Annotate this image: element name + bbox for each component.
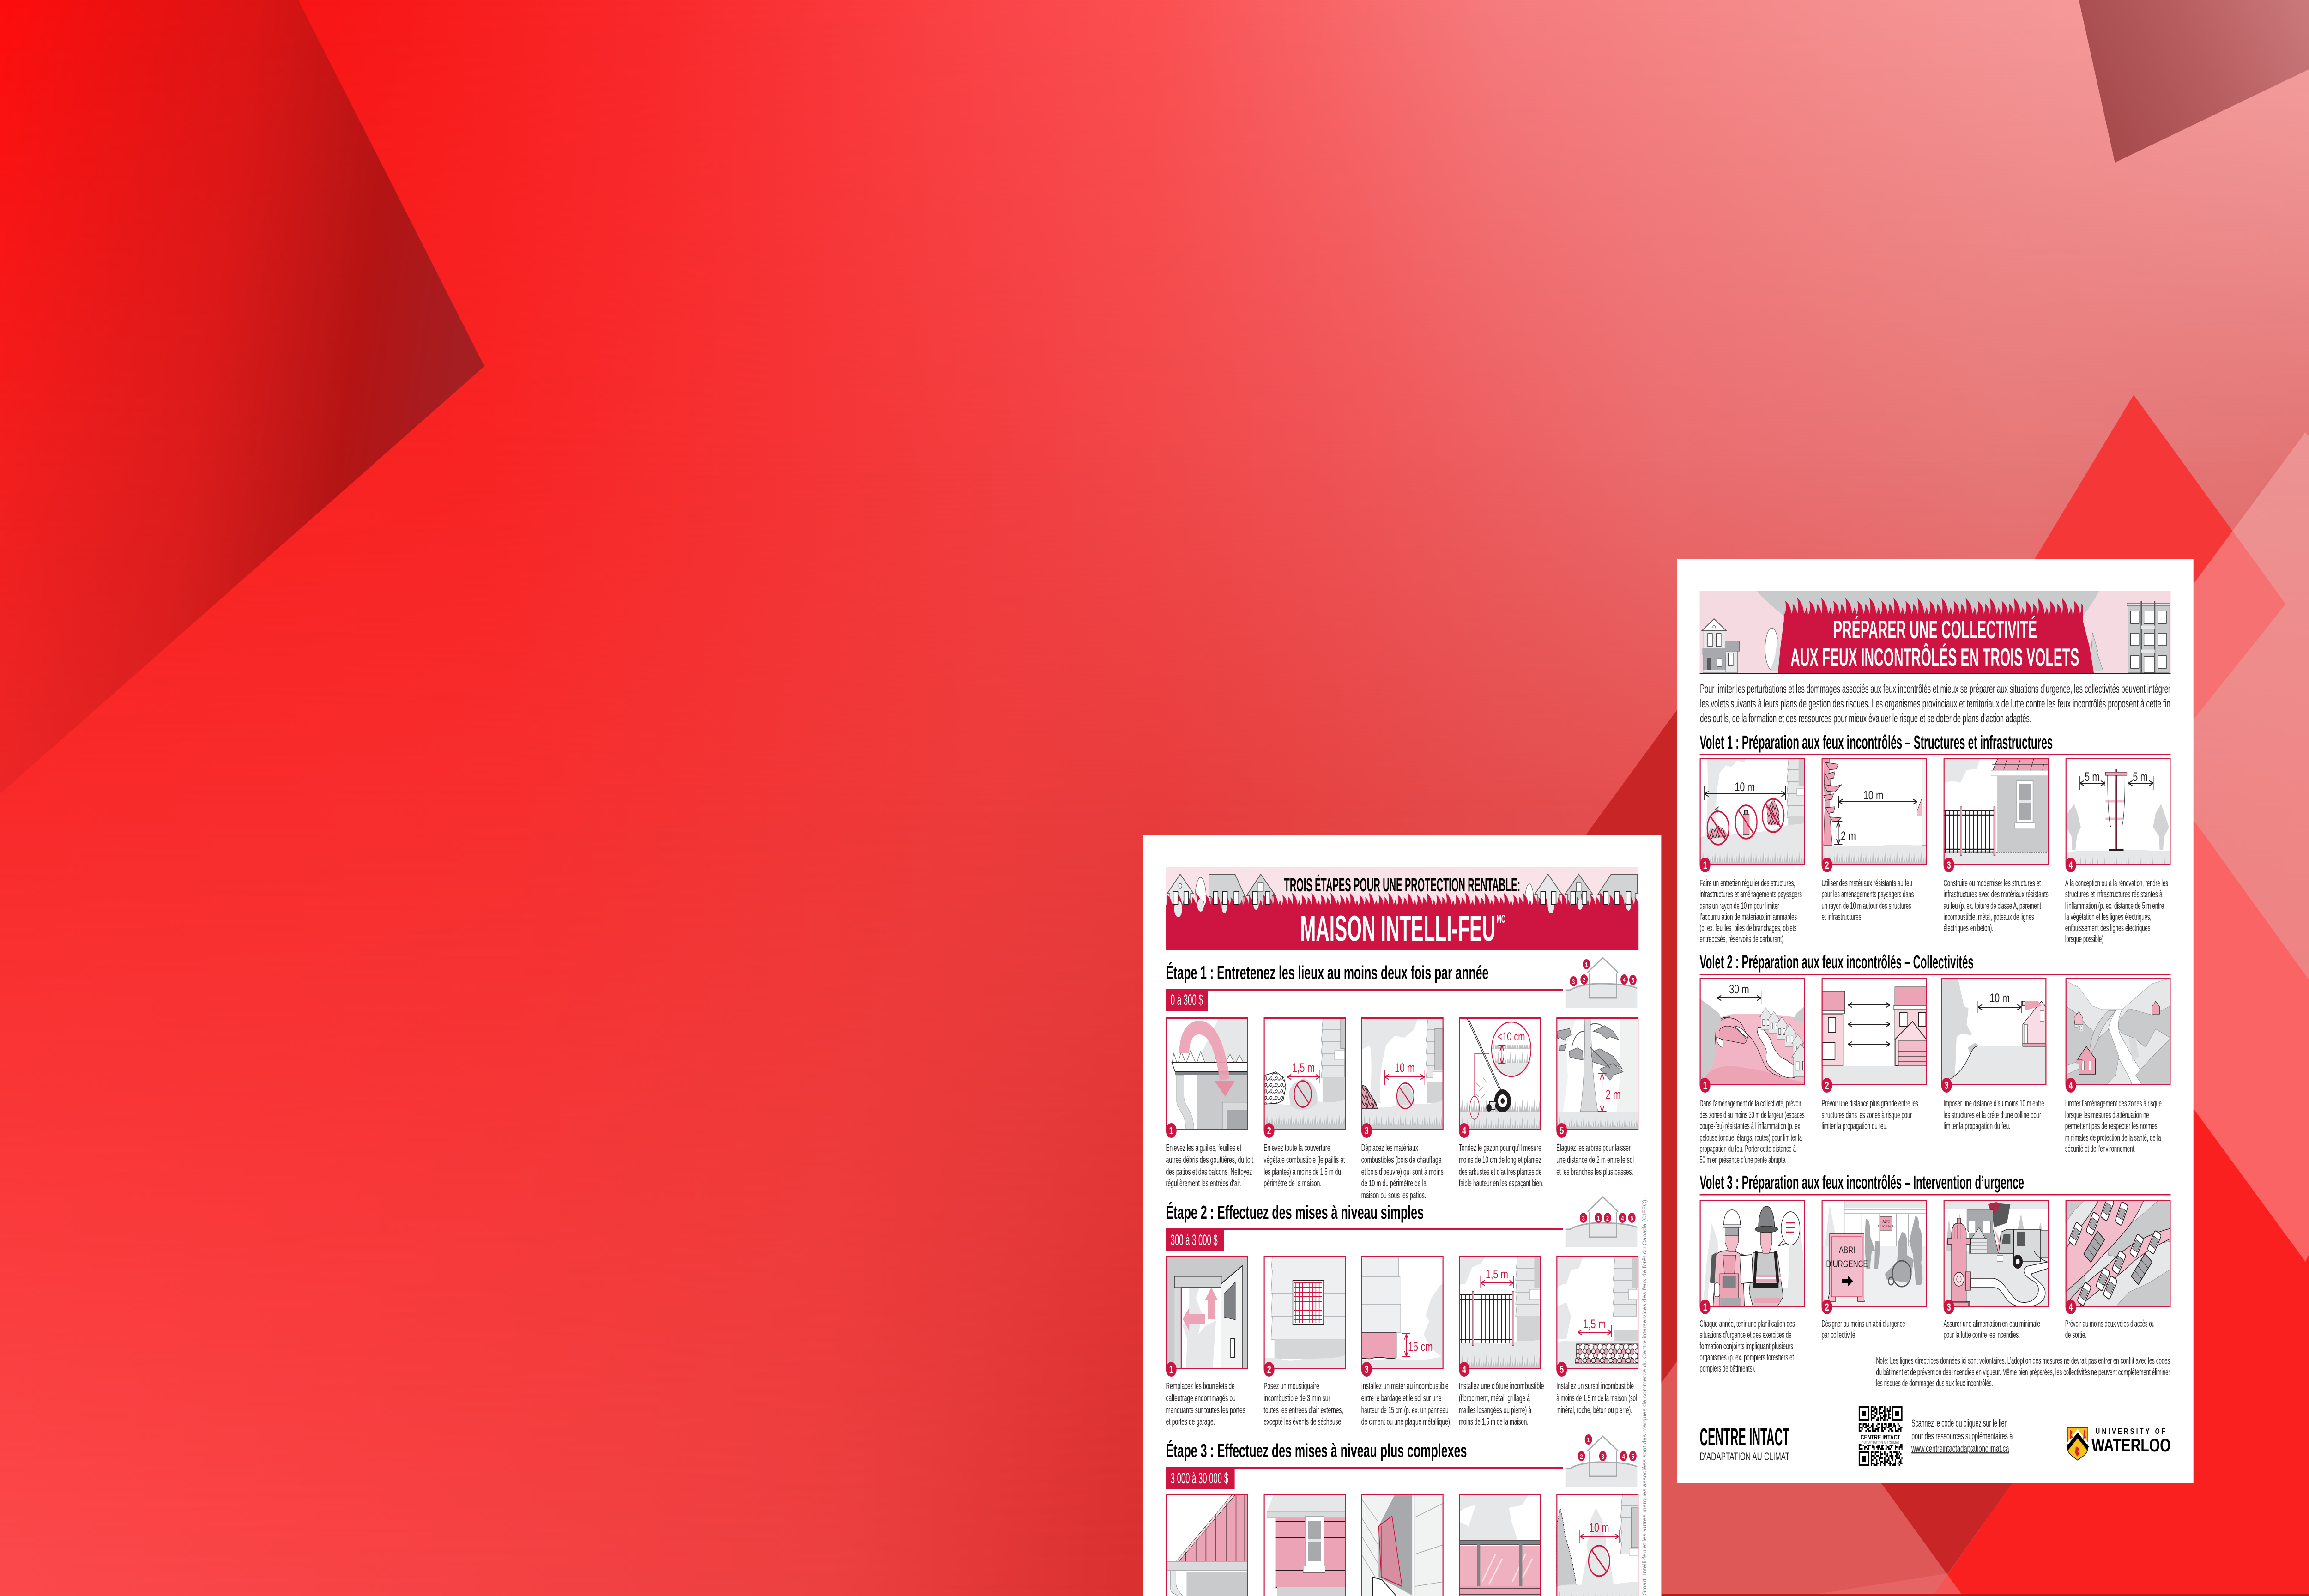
captions: step 2: excepté les évents de sécheuse.: [1264, 1416, 1342, 1427]
diagram: house locator step 2: 4: [1621, 1214, 1624, 1222]
cost badge: 300 à 3 000 $: [1166, 1229, 1224, 1251]
captions: step 2: Remplacez les bourrelets de: [1166, 1381, 1235, 1391]
captions: volet 1: À la conception ou à la rénovation, rendre les: [2065, 878, 2168, 889]
panel: step 1 item 2 plants: 1,5 m: [1292, 1061, 1315, 1075]
diagram: house locator step 2: [1566, 1197, 1637, 1247]
panel: volet 2 item 3 crest setback: 10 m: [1989, 991, 2010, 1005]
panel: step 3 item 1 gable siding: [1167, 1494, 1248, 1596]
intro paragraph: Pour limiter les perturbations et les dommages associés aux feux incontrôlés et mieux se préparer aux situations d’urgence, les collectivités peuvent intégrer: [1700, 682, 2170, 695]
diagram: house locator step 1: 2: [1583, 976, 1585, 984]
captions: step 1: et les branches les plus basses.: [1556, 1167, 1633, 1177]
captions: step 2: Installez une clôture incombustible: [1459, 1381, 1544, 1391]
background shape: bright red polygon: [1933, 820, 2309, 1596]
panel: step 3 item 2 pink siding: [1264, 1494, 1346, 1596]
banner: Préparer une collectivité: [1700, 591, 2171, 674]
captions: volet 1: infrastructures et aménagements paysagers: [1700, 889, 1802, 900]
captions: step 1: et bois d’oeuvre) qui sont à moins: [1361, 1167, 1444, 1177]
captions: volet 1: structures et infrastructures résistantes à: [2065, 889, 2163, 900]
captions: volet 3: Chaque année, tenir une planification des: [1700, 1318, 1795, 1329]
captions: step 2: incombustible de 3 mm sur: [1264, 1393, 1330, 1403]
background shape: top-right dark polygon: [2079, 0, 2309, 163]
panel: volet 1 item 4 utility pole: 5 m: [2133, 770, 2148, 784]
captions: volet 1: (p. ex. feuilles, piles de branchages, objets: [1700, 923, 1797, 933]
captions: volet 1: électriques en béton).: [1944, 923, 1993, 933]
note: du bâtiment et de prévention des incendies en vigueur. Même bien préparées, les collectivités ne peuvent complètement éliminer: [1876, 1367, 2170, 1378]
captions: volet 2: minimales de protection de la santé, de la: [2065, 1132, 2161, 1143]
captions: step 2: à moins de 1,5 m de la maison (sol: [1556, 1393, 1637, 1403]
captions: step 2: toutes les entrées d’air externes,: [1264, 1405, 1343, 1415]
captions: volet 3: Prévoir au moins deux voies d’accès ou: [2065, 1318, 2155, 1329]
cost badge: 0 à 300 $: [1166, 990, 1208, 1011]
cost badge: 0 à 300 $: 0 à 300 $: [1171, 991, 1203, 1008]
panel: volet 1 item 1 clear zone: 1: [1703, 860, 1707, 871]
panel: step 1 item 5 tree: 5: [1559, 1126, 1564, 1137]
captions: volet 2: limiter la propagation du feu.: [1822, 1121, 1888, 1131]
diagram: house locator step 3: 5: [1632, 1452, 1634, 1460]
left responder: [1710, 1210, 1745, 1307]
panel: step 2 item 5 rocks: 5: [1559, 1365, 1564, 1376]
captions: volet 1: incombustible, métal, poteaux de lignes: [1944, 912, 2034, 922]
panel: volet 3 item 1 responders: [1700, 1201, 1805, 1314]
captions: volet 2: lorsque les mesures d’atténuation ne: [2065, 1110, 2149, 1120]
captions: volet 1: lorsque possible).: [2065, 934, 2105, 944]
heading: Étape 3: [1166, 1440, 1563, 1469]
panel: volet 3 item 4 access roads: [2066, 1197, 2171, 1314]
captions: volet 1: l’accumulation de matériaux inflammables: [1700, 912, 1797, 922]
captions: volet 2: 50 m en présence d’une pente abrupte.: [1700, 1155, 1787, 1165]
panel: volet 1 item 4 utility pole: [2066, 758, 2179, 874]
panel: step 1 item 5 tree: [1556, 1017, 1670, 1138]
banner: Maison Intelli-feu: [1166, 867, 1638, 950]
captions: step 1: Déplacez les matériaux: [1361, 1143, 1418, 1153]
heading: Étape 3: Étape 3 : Effectuez des mises à niveau plus complexes: [1166, 1440, 1467, 1461]
right responder: [1740, 1206, 1783, 1307]
hydrant: [1947, 1218, 1970, 1307]
panel: step 1 item 1 gutter: 1: [1169, 1126, 1173, 1137]
panel: step 1 item 5 tree: 2 m: [1606, 1088, 1620, 1101]
icon: right apartment building: [2127, 601, 2170, 673]
captions: volet 1: Faire un entretien régulier des structures,: [1700, 878, 1795, 889]
captions: volet 2: coupe-feu) résistantes à l’inflammation (p. ex.: [1700, 1121, 1801, 1131]
card: Préparer une collectivité poster: [1677, 559, 2194, 1483]
panel: volet 2 item 4 valley risk: 4: [2069, 1081, 2073, 1092]
captions: step 2: minéral, roche, béton ou pierre).: [1556, 1405, 1632, 1415]
card: Maison Intelli-feu poster: [1143, 835, 1670, 1596]
panel: volet 1 item 4 utility pole: 5 m: [2085, 770, 2100, 784]
captions: volet 1: entreposés, réservoirs de carburant).: [1700, 934, 1785, 944]
sign: abri d'urgence: ABRI: [1839, 1245, 1855, 1256]
panel: step 3 item 4 deck: [1459, 1494, 1541, 1596]
captions: volet 2: pelouse tondue, étangs, routes) pour limiter la: [1700, 1132, 1802, 1143]
diagram: house locator step 1: [1566, 958, 1637, 1008]
heading: Étape 1: Étape 1 : Entretenez les lieux au moins deux fois par année: [1166, 962, 1488, 983]
captions: volet 1: dans un rayon de 10 m pour limiter: [1700, 901, 1779, 911]
captions: step 2: Installez un sursol incombustible: [1556, 1381, 1634, 1391]
captions: volet 2: propagation du feu. Porter cette distance à: [1700, 1143, 1796, 1154]
logo: University of Waterloo: UNIVERSITY OF: [2096, 1427, 2165, 1436]
banner title large: MAISON INTELLI-FEU: [1300, 908, 1496, 949]
captions: step 1: faible hauteur en les espaçant bien.: [1459, 1178, 1544, 1189]
captions: step 1: les plantes) à moins de 1,5 m du: [1264, 1167, 1341, 1177]
panel: volet 3 item 2 emergency shelter: D’URGENCE: [1878, 1225, 1894, 1228]
captions: volet 3: pour la lutte contre les incendies.: [1944, 1330, 2020, 1340]
captions: step 2: mailles losangées ou pierre) à: [1459, 1405, 1531, 1415]
captions: volet 2: sécurité et de l’environnement.: [2065, 1143, 2136, 1154]
captions: step 1: combustibles (bois de chauffage: [1361, 1155, 1441, 1165]
panel: volet 2 item 1 firebreak: [1700, 979, 1810, 1093]
background shape: translucent light polygon: [2001, 432, 2309, 1262]
captions: volet 1: l’inflammation (p. ex. distance de 5 m entre: [2065, 901, 2164, 911]
diagram: house locator step 2: 5: [1631, 1214, 1633, 1222]
logo: University of Waterloo: [2067, 1427, 2171, 1460]
diagram: house locator step 1: 1: [1585, 961, 1588, 968]
note: [1876, 1355, 2170, 1389]
QR code: [1859, 1407, 1903, 1465]
diagram: house locator step 3: 1: [1587, 1436, 1590, 1444]
panel: step 1 item 1 gutter: [1166, 1017, 1248, 1138]
icon: flame mass: [1778, 597, 2094, 673]
captions: step 2: [1166, 1381, 1637, 1427]
captions: volet 1: pour les aménagements paysagers dans: [1822, 889, 1914, 900]
captions: volet 1: un rayon de 10 m autour des structures: [1822, 901, 1911, 911]
captions: volet 1: enfouissement des lignes électriques: [2065, 923, 2151, 933]
captions: step 1: Enlevez toute la couverture: [1264, 1143, 1330, 1153]
logo: Centre Intact: CENTRE INTACT: [1700, 1423, 1789, 1451]
captions: step 1: autres débris des gouttières, du toit,: [1166, 1155, 1255, 1165]
panel: volet 3 item 4 access roads: 4: [2069, 1302, 2073, 1313]
captions: volet 2: permettent pas de respecter les normes: [2065, 1121, 2158, 1131]
diagram: house locator step 1: 5: [1632, 976, 1634, 984]
panel: step 3 item 5 tree distance: [1556, 1494, 1644, 1596]
panel: step 1 item 4 mower: [1459, 1018, 1572, 1138]
captions: volet 1: infrastructures avec des matériaux résistants: [1944, 889, 2049, 900]
background shape: dark top-left polygon: [0, 0, 484, 794]
captions: volet 3: situations d’urgence et des exercices de: [1700, 1330, 1791, 1340]
trademark: MC: [1497, 913, 1505, 925]
captions: step 1: des patios et des balcons. Nettoyez: [1166, 1167, 1252, 1177]
logo: Centre Intact: D’ADAPTATION AU CLIMAT: [1700, 1451, 1789, 1463]
captions: volet 1: Utiliser des matériaux résistants au feu: [1822, 878, 1912, 889]
sign: abri d'urgence: D’URGENCE: [1826, 1258, 1868, 1270]
banner title: PRÉPARER UNE COLLECTIVITÉ: [1833, 616, 2037, 644]
diagram: house locator step 3: [1566, 1434, 1637, 1487]
panel: step 2 item 3 siding gap: [1361, 1256, 1444, 1377]
background shape: translucent salmon polygon: [1637, 1281, 1963, 1596]
QR code: D’ADAPTATION AU CLIMAT: [1862, 1440, 1899, 1445]
icon: left house: [1702, 619, 1740, 673]
heading: Étape 2: [1166, 1202, 1563, 1230]
captions: volet 3: Désigner au moins un abri d’urgence: [1822, 1318, 1905, 1329]
panel: step 2 item 2 vent: [1264, 1256, 1346, 1377]
panel: volet 1 item 2 fire-resistant landscaping: 10 m: [1863, 788, 1883, 802]
sign: abri d'urgence: [1826, 1234, 1868, 1301]
captions: step 2: hauteur de 15 cm (p. ex. un panneau: [1361, 1405, 1449, 1415]
panel: volet 3 item 1 responders: 1: [1703, 1302, 1707, 1313]
captions: volet 3: par collectivité.: [1822, 1330, 1857, 1340]
panel: step 2 item 3 siding gap: 15 cm: [1408, 1340, 1433, 1354]
captions: step 2: calfeutrage endommagés ou: [1166, 1393, 1236, 1403]
panel: step 2 item 1 door: 1: [1169, 1365, 1173, 1376]
heading: Étape 2: Étape 2 : Effectuez des mises à niveau simples: [1166, 1202, 1424, 1223]
QR code: CENTRE INTACT: [1861, 1433, 1900, 1441]
panel: volet 3 item 3 water supply: [1944, 1200, 2049, 1314]
note: Note: Les lignes directrices données ici sont volontaires. L’adoption des mesures ne devrait pas entrer en conflit avec les codes: [1876, 1355, 2170, 1366]
diagram: house locator step 3: 2: [1580, 1452, 1583, 1460]
cost badge: 3 000 à 30 000 $: 3 000 à 30 000 $: [1171, 1470, 1228, 1487]
panel: step 2 item 1 door: [1166, 1256, 1248, 1377]
diagram: house locator step 1: 3: [1572, 978, 1575, 985]
logo: University of Waterloo: WATERLOO: [2091, 1435, 2171, 1456]
heading: Volet 2: Volet 2 : Préparation aux feux incontrôlés – Collectivités: [1700, 951, 1974, 973]
speech bubble: [1778, 1212, 1800, 1246]
panel: step 1 item 4 mower: <10 cm: [1498, 1030, 1525, 1043]
captions: step 2: entre le bardage et le sol sur une: [1361, 1393, 1441, 1403]
diagram: house locator step 2: 1: [1597, 1214, 1600, 1222]
panel: step 2 item 5 rocks: [1556, 1256, 1638, 1377]
panel: volet 2 item 4 valley risk: [2066, 978, 2171, 1093]
captions: volet 2: Prévoir une distance plus grande entre les: [1822, 1098, 1918, 1109]
panel: step 2 item 5 rocks: 1,5 m: [1583, 1317, 1606, 1331]
diagram: house locator step 1: 4: [1623, 976, 1626, 984]
captions: step 2: manquants sur toutes les portes: [1166, 1405, 1245, 1415]
panel: volet 1 item 4 utility pole: 4: [2069, 860, 2073, 871]
panel: volet 2 item 1 firebreak: 1: [1703, 1081, 1707, 1092]
captions: step 1: des arbustes et d’autres plantes de: [1459, 1167, 1541, 1177]
captions: step 2: moins de 1,5 m de la maison.: [1459, 1416, 1528, 1427]
cost badge: 3 000 à 30 000 $: [1166, 1468, 1235, 1489]
captions: step 1: périmètre de la maison.: [1264, 1178, 1322, 1189]
scan text: Scannez le code ou cliquez sur le lien: [1911, 1418, 2008, 1429]
captions: volet 3: pompiers de bâtiments).: [1700, 1363, 1755, 1374]
captions: volet 1: et infrastructures.: [1822, 912, 1863, 922]
heading: Volet 3: Volet 3 : Préparation aux feux incontrôlés – Intervention d’urgence: [1700, 1172, 2024, 1193]
diagram: house locator step 2: 2: [1606, 1214, 1609, 1222]
heading: Volet 1: Volet 1 : Préparation aux feux incontrôlés – Structures et infrastructures: [1700, 732, 2053, 753]
captions: volet 2: Dans l’aménagement de la collectivité, prévoir: [1700, 1098, 1801, 1109]
captions: step 2: Posez un moustiquaire: [1264, 1381, 1319, 1391]
captions: step 1: maison ou sous les patios.: [1361, 1190, 1426, 1201]
panel: step 1 item 3 firewood: 3: [1365, 1126, 1369, 1137]
panel: volet 2 item 1 firebreak: 30 m: [1729, 982, 1749, 996]
panel: step 1 item 3 firewood: [1361, 1017, 1475, 1138]
panel: volet 3 item 2 emergency shelter: 2: [1825, 1302, 1829, 1313]
captions: volet 3: formation conjoints impliquant plusieurs: [1700, 1341, 1793, 1352]
captions: volet 1: au feu (p. ex. toiture de classe A, parement: [1944, 901, 2041, 911]
vertical trademark note: Smart, Intelli-feu et les autres marques associées sont des marques de commerce du Centre interservices des feux de forêt du Canada (CIFFC).: [1641, 1198, 1647, 1595]
intro paragraph: des outils, de la formation et des ressources pour mieux évaluer le risque et se doter de plans d’action adaptés.: [1700, 711, 2031, 725]
panel: step 2 item 4 fence: 1,5 m: [1486, 1267, 1508, 1281]
banner title: [1790, 616, 2079, 672]
panel: volet 1 item 1 clear zone: 10 m: [1735, 780, 1755, 794]
captions: volet 3: [1700, 1318, 2155, 1374]
panel: step 2 item 2 vent: 2: [1267, 1365, 1271, 1376]
panel: volet 1 item 2 fire-resistant landscaping: 2 m: [1841, 829, 1856, 843]
panel: step 3 item 3 window: [1361, 1494, 1444, 1596]
captions: volet 3: Assurer une alimentation en eau minimale: [1944, 1318, 2040, 1329]
captions: step 2: Installez un matériau incombustible: [1361, 1381, 1449, 1391]
captions: volet 2: Imposer une distance d’au moins 10 m entre: [1944, 1098, 2044, 1109]
captions: volet 1: la végétation et les lignes électriques,: [2065, 912, 2152, 922]
captions: step 1: de 10 m du périmètre de la: [1361, 1178, 1427, 1189]
cost badge: 300 à 3 000 $: 300 à 3 000 $: [1171, 1232, 1218, 1248]
icon: trees beside fire: [1765, 628, 2103, 671]
panel: step 2 item 4 fence: [1459, 1256, 1572, 1377]
captions: step 1: régulièrement les entrées d’air.: [1166, 1178, 1242, 1189]
panel: step 1 item 2 plants: 2: [1267, 1126, 1271, 1137]
captions: volet 3: de sortie.: [2065, 1330, 2086, 1340]
captions: volet 2: structures dans les zones à risque pour: [1822, 1110, 1912, 1120]
captions: volet 3: organismes (p. ex. pompiers forestiers et: [1700, 1352, 1794, 1363]
captions: volet 2: limiter la propagation du feu.: [1944, 1121, 2010, 1131]
panel: step 1 item 4 mower: 4: [1462, 1126, 1466, 1137]
scan text: www.centreintactadaptationclimat.ca: [1911, 1444, 2009, 1455]
captions: volet 1: Construire ou moderniser les structures et: [1944, 878, 2041, 889]
captions: step 1: végétale combustible (le paillis et: [1264, 1155, 1345, 1165]
captions: step 1: Tondez le gazon pour qu’il mesure: [1459, 1143, 1541, 1153]
captions: volet 2: les structures et la crête d’une colline pour: [1944, 1110, 2041, 1120]
panel: step 2 item 3 siding gap: 3: [1365, 1365, 1369, 1376]
fire truck: [1997, 1229, 2049, 1269]
captions: step 2: et portes de garage.: [1166, 1416, 1215, 1427]
panel: step 1 item 2 plants: [1264, 1017, 1377, 1138]
diagram: house locator step 2: 3: [1582, 1214, 1585, 1222]
panel: step 3 item 5 tree distance: 10 m: [1589, 1521, 1609, 1535]
intro paragraph: [1700, 682, 2170, 725]
logo: Centre Intact: [1700, 1423, 1789, 1463]
captions: volet 2: Limiter l’aménagement des zones à risque: [2065, 1098, 2162, 1109]
intro paragraph: les volets suivants à leurs plans de gestion des risques. Les organismes provinciaux et territoriaux de lutte contre les feux incontrôlés proposent à cette fin: [1700, 696, 2170, 710]
panel: volet 2 item 2 building spacing: [1822, 979, 1927, 1093]
panel: volet 1 item 2 fire-resistant landscaping: 2: [1825, 860, 1829, 871]
panel: volet 3 item 3 water supply: 3: [1947, 1302, 1951, 1313]
panel: volet 3 item 2 emergency shelter: ABRI: [1883, 1219, 1890, 1224]
background shape: red rhombus: [1871, 395, 2285, 831]
panel: volet 2 item 3 crest setback: 3: [1945, 1081, 1949, 1092]
panel: volet 2 item 2 building spacing: 2: [1825, 1081, 1829, 1092]
scan text: [1911, 1418, 2013, 1455]
captions: step 1: Élaguez les arbres pour laisser: [1556, 1143, 1631, 1153]
note: les risques de dommages dus aux feux incontrôlés.: [1876, 1378, 1993, 1389]
captions: volet 2: [1700, 1098, 2162, 1165]
panel: volet 1 item 3 fire-resistant building: [1944, 758, 2049, 872]
banner title small: TROIS ÉTAPES POUR UNE PROTECTION RENTABLE:: [1284, 874, 1520, 895]
background strip at bottom: [1662, 1594, 2309, 1596]
panel: volet 1 item 3 fire-resistant building: 3: [1947, 860, 1951, 871]
panel: volet 3 item 2 emergency shelter: [1822, 1200, 1927, 1314]
diagram: house locator step 3: 4: [1622, 1452, 1625, 1460]
panel: volet 1 item 1 clear zone: [1700, 755, 1813, 872]
captions: volet 2: des zones d’au moins 30 m de largeur (espaces: [1700, 1110, 1805, 1120]
scan text: pour des ressources supplémentaires à: [1911, 1431, 2013, 1442]
captions: step 2: (fibrociment, métal, grillage à: [1459, 1393, 1530, 1403]
captions: step 1: une distance de 2 m entre le sol: [1556, 1155, 1634, 1165]
panel: step 1 item 3 firewood: 10 m: [1395, 1061, 1415, 1075]
background shape: dark red polygon behind cards: [1585, 563, 2071, 1596]
captions: step 2: de ciment ou une plaque métallique).: [1361, 1416, 1451, 1427]
captions: step 1: moins de 10 cm de long et plantez: [1459, 1155, 1541, 1165]
captions: step 1: Enlevez les aiguilles, feuilles et: [1166, 1143, 1241, 1153]
panel: volet 2 item 3 crest setback: [1941, 978, 2046, 1093]
captions: volet 1: [1700, 878, 2168, 944]
diagram: house locator step 3: 3: [1602, 1452, 1604, 1460]
captions: step 1: [1166, 1143, 1634, 1201]
banner title: AUX FEUX INCONTRÔLÉS EN TROIS VOLETS: [1790, 643, 2079, 672]
panel: step 2 item 4 fence: 4: [1462, 1365, 1466, 1376]
panel: volet 1 item 2 fire-resistant landscaping: [1822, 758, 1935, 872]
